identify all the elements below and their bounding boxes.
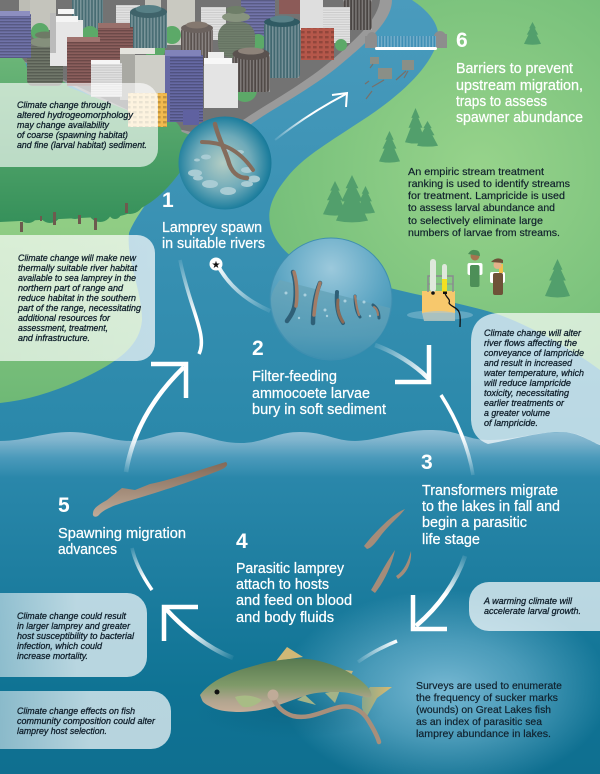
step 2: ammocoete larvae [252, 386, 370, 402]
step 2: bury in soft sediment [252, 402, 386, 418]
text: stream treatment: to selectively eliminate large [408, 215, 543, 227]
callout: river flows: earlier treatments or [484, 398, 565, 409]
text: surveys: (wounds) on Great Lakes fish [416, 704, 551, 716]
callout: sediment: of coarse (spawning habitat) [17, 130, 128, 141]
bubble: filter-feeding larvae [270, 238, 392, 360]
step 6: traps to assess [456, 94, 547, 110]
callout: thermal habitat: part of the range, necessitating [17, 303, 142, 314]
callout: thermal habitat: Climate change will make new [18, 253, 137, 264]
cycle arrow: step 2 to 3 [375, 345, 429, 382]
traps and spawners [365, 57, 414, 99]
tree canopy: left bank [0, 53, 190, 223]
callout: lamprey size: increase mortality. [17, 651, 88, 662]
step 4 [236, 530, 352, 626]
step 5: advances [58, 542, 117, 558]
cycle arrow: step 6 stem [180, 260, 201, 354]
upstream arrow [275, 93, 347, 140]
step 3: Transformers migrate [422, 483, 558, 499]
callout: river flows: toxicity, necessitating [484, 388, 570, 399]
callout: river flows: Climate change will alter [484, 328, 582, 339]
callout: thermal habitat: additional resources for [18, 313, 111, 324]
callout: lamprey size: Climate change could result [17, 611, 126, 622]
text: surveys: Surveys are used to enumerate [416, 680, 562, 692]
text: stream treatment: ranking is used to identify streams [408, 178, 570, 190]
callout: thermal habitat: and infrastructure. [18, 333, 90, 344]
text: stream treatment: for treatment. Lampricide is used [408, 190, 565, 202]
callout: sediment: may change availability [17, 120, 110, 131]
callout: river flows: a greater volume [484, 408, 550, 419]
step 3: to the lakes in fall and [422, 499, 560, 515]
text: stream treatment [408, 166, 570, 239]
step 6: 6 [456, 29, 468, 52]
callout: lamprey size: in larger lamprey and greater [17, 621, 131, 632]
text: surveys [416, 680, 562, 740]
step 4: and feed on blood [236, 593, 352, 609]
callout: sediment [0, 83, 158, 167]
step 4: 4 [236, 530, 248, 553]
callout: thermal habitat: thermally suitable river habitat [18, 263, 137, 274]
callout: river flows: and result in increased [484, 358, 573, 369]
step 4: and body fluids [236, 610, 334, 626]
river background [0, 0, 600, 440]
callout: thermal habitat: reduce habitat in the southern [18, 293, 136, 304]
cycle arrow: step 4 stem [358, 641, 397, 662]
callout: larval growth: accelerate larval growth. [484, 606, 581, 617]
callout: thermal habitat: assessment, treatment, [18, 323, 108, 334]
callout: river flows: will reduce lampricide [484, 378, 571, 389]
text: surveys: the frequency of sucker marks [416, 692, 558, 704]
callout: river flows: river flows affecting the [484, 338, 577, 349]
step 1: in suitable rivers [162, 236, 265, 252]
glow behind survey text [280, 590, 600, 774]
text: surveys: lamprey abundance in lakes. [416, 728, 551, 740]
callout: thermal habitat: available to sea lamprey in the [18, 273, 136, 284]
step 1: Lamprey spawn [162, 220, 262, 236]
callout: lamprey size: host susceptibility to bacterial [17, 631, 135, 642]
callout: thermal habitat: northern part of range and [18, 283, 124, 294]
step 2: Filter-feeding [252, 369, 337, 385]
step 5: Spawning migration [58, 526, 186, 542]
lampreys: transformers [364, 509, 411, 593]
callout: lamprey size: infection, which could [17, 641, 103, 652]
step 6: upstream migration, [456, 78, 583, 94]
city: trees between buildings [31, 23, 266, 102]
step 2: 2 [252, 337, 264, 360]
text: stream treatment: to assess larval abundance and [408, 202, 555, 214]
step 1 [162, 189, 265, 252]
treatment station [407, 259, 473, 327]
lake with wave surface [0, 430, 600, 774]
callout: sediment: altered hydrogeomorphology [17, 110, 134, 121]
cycle arrow: step 3 stem [441, 395, 473, 475]
callout: host selection: Climate change effects on fish [17, 706, 135, 717]
tree trunks [20, 203, 128, 232]
city: back row of buildings [19, 0, 323, 45]
people: field crew [468, 250, 505, 295]
callout: river flows: conveyance of lampricide [484, 348, 584, 359]
cycle arrow: step 4 to 5 [164, 607, 233, 658]
road and city ground [0, 0, 392, 145]
callout: host selection [0, 691, 171, 749]
step 3: life stage [422, 532, 480, 548]
callout: larval growth [469, 582, 600, 631]
callout: sediment: Climate change through [17, 100, 111, 111]
step 3 [421, 451, 560, 548]
step 1: 1 [162, 189, 174, 212]
step 2 [252, 337, 386, 418]
cycle arrow: star to larvae: ★ [212, 260, 221, 271]
bubble: spawning lamprey [178, 116, 272, 210]
callout: sediment: and fine (larval habitat) sediment. [17, 140, 147, 151]
callout: larval growth: A warming climate will [483, 596, 573, 607]
city: rectangular front buildings [0, 7, 350, 127]
callout: host selection: community composition could alter [17, 716, 156, 727]
lamprey: migrating adult [93, 462, 227, 517]
callout: lamprey size [0, 593, 147, 677]
text: surveys: as an index of parasitic sea [416, 716, 542, 728]
step 6: spawner abundance [456, 110, 583, 126]
callout: river flows: of lampricide. [484, 418, 538, 429]
cycle arrow: step 3 to 4 [413, 556, 465, 629]
step 3: begin a parasitic [422, 515, 527, 531]
step 6: Barriers to prevent [456, 61, 573, 77]
step 4: attach to hosts [236, 577, 329, 593]
step 5: 5 [58, 494, 70, 517]
city: cylindrical towers [27, 0, 372, 86]
land: left bank [0, 100, 185, 403]
cycle arrow: step 5 stem [132, 548, 152, 590]
callout: thermal habitat [0, 235, 155, 361]
cycle arrow: step 5 to 6 [126, 364, 186, 472]
fish with attached lamprey [195, 647, 392, 742]
text: stream treatment: numbers of larvae from streams. [408, 227, 560, 239]
callout: river flows [471, 313, 600, 445]
step 3: 3 [421, 451, 433, 474]
callout: river flows: water temperature, which [484, 368, 584, 379]
step 5 [58, 494, 186, 558]
dam [365, 31, 447, 50]
callout: host selection: lamprey host selection. [17, 726, 107, 737]
cycle arrow: star to larvae [210, 258, 270, 311]
land: right bank [269, 0, 600, 370]
pine trees [323, 22, 570, 298]
step 4: Parasitic lamprey [236, 561, 345, 577]
step 6 [456, 29, 583, 126]
text: stream treatment: An empiric stream treatment [408, 166, 544, 178]
